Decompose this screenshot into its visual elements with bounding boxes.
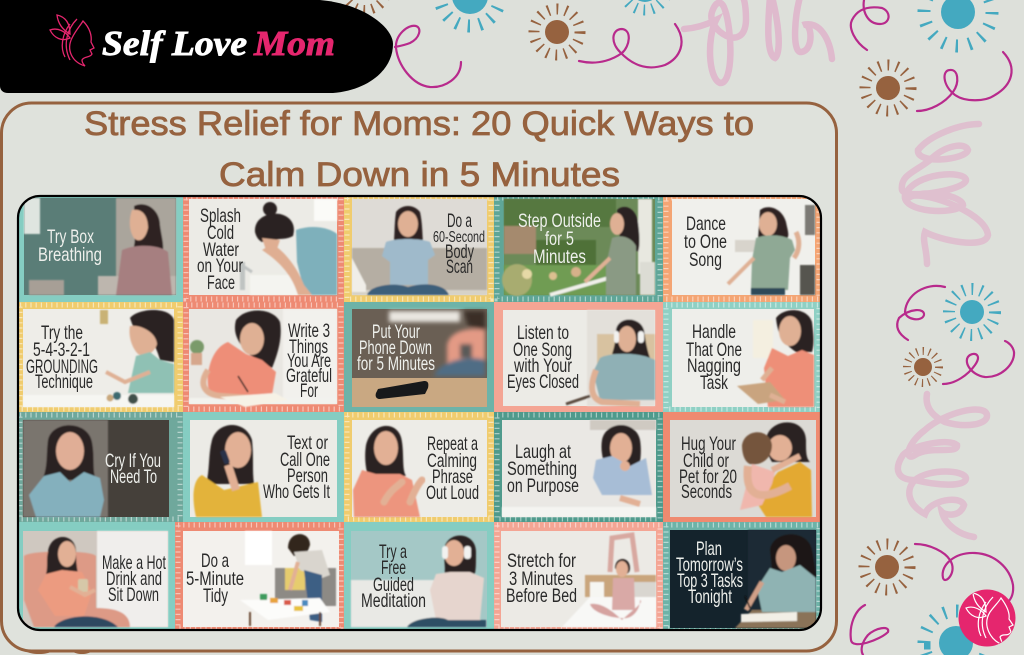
card: Stretch for 3 Minutes: 3 Minutes	[509, 568, 573, 590]
card: Do a 5-Minute Tidy: Tidy	[203, 585, 228, 607]
card: Make a Hot Drink: Make a Hot	[102, 552, 166, 574]
sun: teal middle right	[949, 289, 995, 335]
sun: brown lower right	[864, 544, 910, 590]
card: Handle That One Nagging Task: Handle	[692, 321, 736, 343]
swirl: magenta right	[917, 52, 1012, 111]
card: Plan Tomorrow's Top 3 Tasks: Plan	[696, 538, 722, 560]
card: Do a 5-Minute Tidy: Do a	[201, 550, 229, 572]
card: Handle That One Nagging Task: Nagging	[687, 355, 741, 377]
swirl: magenta mid right lower	[943, 341, 1014, 384]
card: Try a Free Guided Meditation: Guided	[373, 574, 414, 596]
card: Plan Tomorrow's Top 3 Tasks	[663, 522, 822, 631]
main panel	[2, 103, 836, 651]
card: Write 3 Things	[183, 302, 344, 412]
card: Splash Cold Water: Splash	[200, 205, 241, 227]
card: Text or Call One Person	[183, 412, 344, 522]
card: Step Outside for 5 Minutes	[494, 195, 663, 302]
card: Text or Call One Person: Who Gets It	[263, 481, 330, 503]
card: Hug Your Child: Hug Your	[681, 433, 736, 455]
swirl: magenta mid right	[897, 286, 945, 340]
title: Stress Relief for Moms: 20 Quick Ways to	[84, 105, 754, 143]
card: Stretch for 3 Minutes: Stretch for	[507, 550, 576, 572]
swirl: magenta top right	[851, 0, 889, 50]
logo wordmark: Mom	[253, 24, 335, 63]
card: Text or Call One Person: Call One	[280, 449, 330, 471]
card: Try a Free Guided Meditation	[344, 522, 494, 631]
card: Repeat a Calming Phrase: Calming	[427, 450, 477, 472]
card: 5-4-3-2-1 Grounding: 5-4-3-2-1	[33, 339, 90, 361]
card: Do a 60-Second Body Scan: 60-Second	[433, 229, 485, 246]
sun: brown middle right	[907, 351, 939, 383]
card: Step Outside for 5 Minutes: Minutes	[533, 246, 586, 268]
sun: brown right	[865, 65, 911, 111]
swirl: magenta by logo	[395, 26, 461, 87]
card: Handle That One Nagging Task: That One	[686, 339, 742, 361]
card: Dance to One Song: Song	[689, 249, 722, 271]
card: Repeat a Calming Phrase	[344, 412, 494, 522]
card: Write 3 Things: Things	[289, 336, 328, 358]
card: Do a 60-Second Body Scan: Do a	[447, 210, 472, 232]
card: Splash Cold Water	[183, 195, 344, 302]
card: Repeat a Calming Phrase: Out Loud	[426, 482, 479, 504]
card: Text or Call One Person: Text or	[287, 432, 328, 454]
card: Listen to One Song: Listen to	[517, 322, 569, 344]
card: Hug Your Child: Child or	[683, 450, 729, 472]
card: Cry If You Need To: Need To	[110, 466, 157, 488]
logo wordmark: Self Love	[102, 24, 247, 63]
card: Plan Tomorrow's Top 3 Tasks: Tomorrow’s	[676, 554, 743, 576]
sun: teal bottom right	[924, 611, 988, 655]
card: Splash Cold Water: Cold	[207, 222, 234, 244]
card: 5-4-3-2-1 Grounding: Try the	[41, 322, 83, 344]
card: Laugh at Something: Laugh at	[515, 441, 571, 463]
card: Put Your Phone Down: for 5 Minutes	[357, 353, 435, 375]
bottom brown tabs under panel	[26, 651, 92, 654]
card: Repeat a Calming Phrase: Phrase	[432, 466, 473, 488]
logo wordmark	[102, 24, 335, 63]
decorative suns and swirls	[343, 0, 1014, 655]
card: Splash Cold Water: on Your	[197, 255, 243, 277]
card: Try a Free Guided Meditation: Free	[381, 557, 406, 579]
swirl: pink right upper	[902, 124, 988, 264]
card: Do a 60-Second Body Scan	[344, 195, 494, 302]
card: Dance to One Song	[663, 195, 822, 302]
card: Put Your Phone Down: Phone Down	[359, 337, 432, 359]
card: Write 3 Things: Write 3	[288, 320, 330, 342]
panel outline	[2, 103, 836, 651]
card: Hug Your Child: Pet for 20	[679, 466, 737, 488]
card: 5-4-3-2-1 Grounding: GROUNDING	[26, 356, 98, 378]
card: Listen to One Song: One Song	[513, 339, 572, 361]
header logo bar	[0, 0, 393, 93]
card: Listen to One Song: Eyes Closed	[507, 371, 579, 393]
card: Do a 60-Second Body Scan: Body	[445, 241, 474, 263]
card: Put Your Phone Down	[344, 302, 494, 412]
card: Try Box Breathing: Breathing	[38, 244, 102, 266]
card: Listen to One Song: with Your	[513, 355, 572, 377]
sun: teal top partial	[623, 0, 667, 10]
floating logo badge	[958, 590, 1016, 646]
title	[84, 105, 754, 194]
card: Write 3 Things: For	[300, 380, 318, 402]
grid rounded outline	[18, 196, 821, 630]
card: Plan Tomorrow's Top 3 Tasks: Tonight	[688, 586, 732, 608]
card: Dance to One Song: Dance	[686, 213, 726, 235]
card: Text or Call One Person: Person	[287, 465, 328, 487]
card: Stretch for 3 Minutes: Before Bed	[506, 585, 577, 607]
card: Laugh at Something: on Purpose	[507, 475, 579, 497]
card: Splash Cold Water: Water	[203, 239, 239, 261]
card: Laugh at Something: Something	[507, 458, 577, 480]
logo icon: butterfly woman	[50, 15, 94, 66]
sun: brown top	[534, 9, 580, 55]
card: Listen to One Song	[494, 302, 663, 412]
card: Make a Hot Drink: Sit Down	[108, 584, 159, 606]
card: Try a Free Guided Meditation: Meditation	[361, 590, 426, 612]
grid of 20 cards	[18, 195, 822, 631]
card: Do a 5-Minute Tidy	[175, 522, 344, 631]
card: Write 3 Things: Grateful	[286, 365, 332, 387]
card: Try Box Breathing: Try Box	[47, 226, 94, 248]
swirl: pink right lower	[898, 394, 987, 537]
card: Write 3 Things: You Are	[287, 350, 331, 372]
logo bar background	[0, 0, 393, 93]
card: Handle That One Nagging Task	[663, 302, 822, 412]
card: Hug Your Child: Seconds	[681, 481, 732, 503]
card: Splash Cold Water: Face	[207, 272, 235, 294]
card: 5-4-3-2-1 Grounding: Technique	[35, 371, 93, 393]
swirl: magenta lower right	[915, 544, 1013, 602]
card: 5-4-3-2-1 Grounding	[18, 302, 183, 412]
card: Make a Hot Drink	[18, 522, 175, 631]
card: Put Your Phone Down: Put Your	[372, 321, 420, 343]
card: Laugh at Something	[494, 412, 663, 522]
card: Repeat a Calming Phrase: Repeat a	[427, 433, 478, 455]
card: Hug Your Child	[663, 412, 822, 522]
swirl: magenta top centre	[579, 24, 682, 67]
card: Stretch for 3 Minutes	[494, 522, 663, 631]
sun: teal top right	[924, 0, 992, 46]
card: Dance to One Song: to One	[684, 231, 727, 253]
card: Step Outside for 5 Minutes: for 5	[545, 228, 574, 250]
title: Calm Down in 5 Minutes	[219, 156, 620, 194]
sun: brown top centre	[343, 0, 387, 10]
card: Cry If You Need To	[18, 412, 183, 522]
card: Handle That One Nagging Task: Task	[700, 372, 728, 394]
card: Step Outside for 5 Minutes: Step Outside	[518, 210, 601, 232]
card: Make a Hot Drink: Drink and	[106, 568, 162, 590]
card: Try Box Breathing	[18, 195, 183, 302]
card: Do a 60-Second Body Scan: Scan	[446, 256, 473, 278]
card: Do a 5-Minute Tidy: 5-Minute	[186, 568, 244, 590]
sun: teal top	[440, 0, 500, 26]
card: Cry If You Need To: Cry If You	[105, 450, 161, 472]
card: Try a Free Guided Meditation: Try a	[379, 541, 407, 563]
swirl: pink top	[684, 0, 832, 83]
card: Plan Tomorrow's Top 3 Tasks: Top 3 Tasks	[677, 570, 743, 592]
swirl: magenta bottom right	[851, 605, 888, 655]
